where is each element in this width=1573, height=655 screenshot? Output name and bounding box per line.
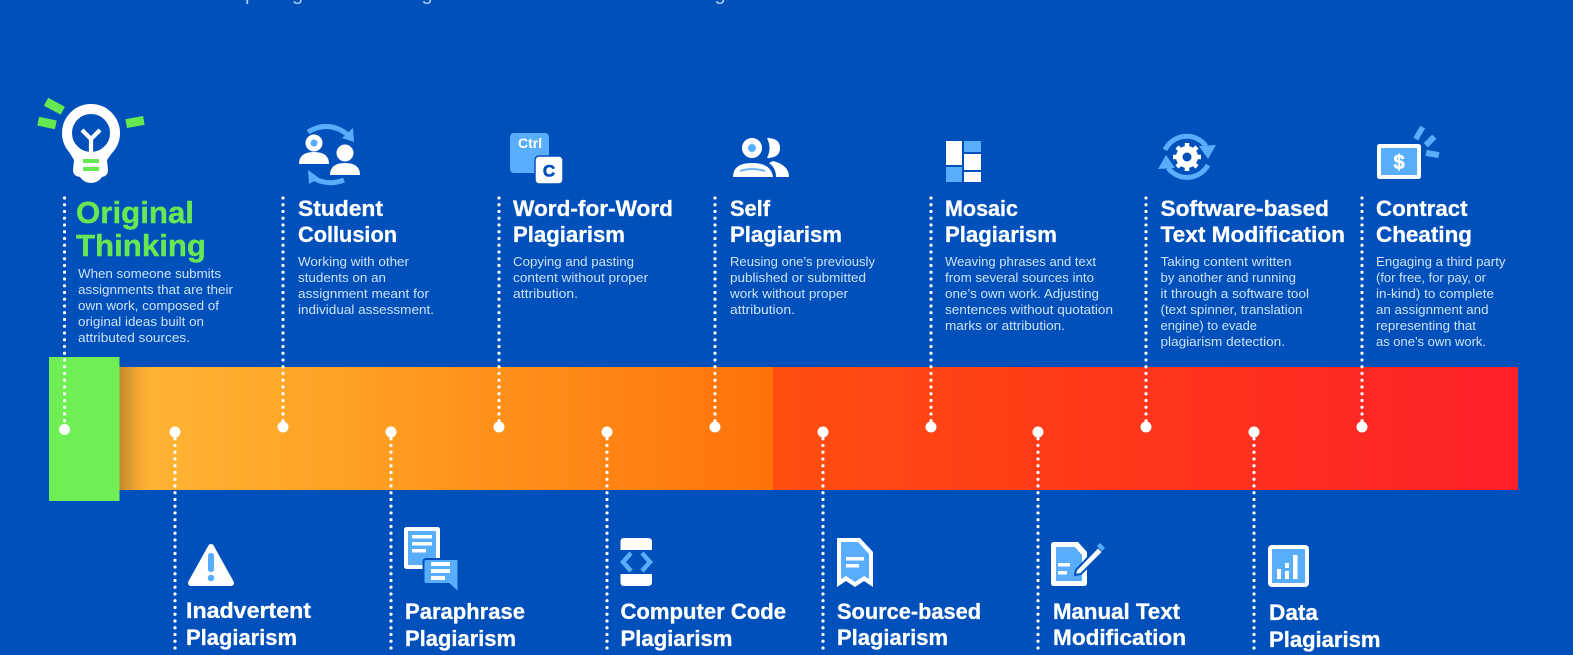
leader line	[929, 198, 933, 427]
description: When someone submits	[78, 266, 222, 281]
description: attribution.	[513, 286, 578, 301]
icon: Ctrl C keys	[510, 133, 563, 184]
heading: Data	[1269, 600, 1319, 625]
heading	[837, 599, 981, 650]
panel: Manual Text Modification	[1032, 426, 1186, 650]
description: Engaging a third party	[1376, 254, 1506, 269]
description: Taking content written	[1160, 254, 1292, 269]
leader line	[1360, 198, 1364, 427]
description	[78, 266, 234, 345]
heading: Plagiarism	[1269, 627, 1380, 652]
description: attributed sources.	[78, 330, 190, 345]
panel: Word-for-Word Plagiarism	[494, 133, 673, 432]
leader line	[713, 198, 717, 427]
heading: Plagiarism	[730, 222, 842, 247]
heading: Plagiarism	[945, 222, 1057, 247]
heading: Plagiarism	[513, 222, 625, 247]
description: an assignment and	[1376, 302, 1488, 317]
leader line	[821, 432, 825, 650]
heading: Computer Code	[620, 599, 786, 624]
icon: torn document	[837, 538, 873, 587]
description: assignment meant for	[298, 286, 430, 301]
description: in-kind) to complete	[1376, 286, 1494, 301]
heading: Plagiarism	[186, 625, 297, 650]
marker dot	[59, 424, 70, 435]
leader line	[1252, 432, 1256, 650]
description: from several sources into	[945, 270, 1094, 285]
marker dot	[926, 422, 936, 432]
description	[1160, 254, 1309, 349]
description	[1376, 254, 1506, 349]
marker dot	[818, 426, 828, 438]
heading: Plagiarism	[620, 626, 732, 651]
heading: Modification	[1053, 625, 1186, 650]
panel: Source-based Plagiarism	[818, 426, 981, 650]
leader line	[281, 198, 285, 427]
description: Copying and pasting	[513, 254, 634, 269]
marker dot	[170, 426, 180, 438]
description: engine) to evade	[1160, 318, 1257, 333]
panel: Paraphrase Plagiarism	[386, 426, 525, 651]
icon: person with shadow	[733, 138, 789, 177]
marker dot	[278, 422, 288, 432]
description: Working with other	[298, 254, 410, 269]
icon: money screen	[1377, 126, 1439, 179]
heading: Original	[76, 196, 194, 230]
cropped header text	[245, 0, 726, 5]
icon: Ctrl C keys: Ctrl	[518, 135, 542, 151]
heading	[76, 196, 206, 263]
description	[513, 254, 649, 301]
description: (text spinner, translation	[1160, 302, 1302, 317]
panel: Self Plagiarism	[710, 138, 875, 432]
description: one’s own work. Adjusting	[945, 286, 1099, 301]
leader line	[497, 198, 501, 427]
heading	[1269, 600, 1380, 652]
icon: money screen: $	[1393, 152, 1405, 174]
marker dot	[602, 426, 612, 438]
panel: Software-based Text Modification	[1140, 136, 1345, 432]
icon: light bulb	[37, 98, 145, 183]
leader line	[1144, 198, 1148, 427]
marker dot	[1356, 422, 1368, 432]
heading	[513, 196, 673, 247]
heading: Contract	[1376, 196, 1468, 221]
leader line	[1036, 432, 1040, 650]
description: students on an	[298, 270, 386, 285]
heading: Software-based	[1160, 196, 1329, 221]
description: assignments that are their	[78, 282, 234, 297]
description: it through a software tool	[1160, 286, 1309, 301]
heading	[405, 599, 525, 651]
description: individual assessment.	[298, 302, 434, 317]
description: content without proper	[513, 270, 649, 285]
leader line	[63, 198, 66, 429]
heading	[1160, 196, 1345, 247]
icon: document and speech bubble	[404, 527, 458, 593]
description: marks or attribution.	[945, 318, 1065, 333]
heading: Cheating	[1376, 222, 1472, 247]
marker dot	[386, 426, 396, 438]
leader line	[173, 432, 177, 650]
description: Reusing one’s previously	[730, 254, 875, 269]
heading	[1376, 196, 1472, 247]
description: attribution.	[730, 302, 795, 317]
panel: Data Plagiarism	[1248, 426, 1380, 652]
icon: warning triangle	[191, 547, 231, 583]
description: published or submitted	[730, 270, 866, 285]
description: work without proper	[729, 286, 849, 301]
heading: Source-based	[837, 599, 981, 624]
heading	[186, 598, 312, 650]
heading	[298, 196, 397, 247]
heading: Student	[298, 196, 384, 221]
marker dot	[494, 422, 504, 432]
panel: Inadvertent Plagiarism	[170, 426, 312, 650]
heading	[730, 196, 842, 247]
icon: document and pencil	[1051, 542, 1105, 586]
heading: Plagiarism	[405, 626, 516, 651]
heading: Mosaic	[945, 196, 1018, 221]
marker dot	[710, 422, 720, 432]
marker dot	[1032, 426, 1044, 438]
leader line	[389, 432, 393, 650]
icon: mosaic tiles	[946, 141, 981, 182]
heading: Manual Text	[1053, 599, 1181, 624]
description	[729, 254, 875, 317]
heading	[945, 196, 1057, 247]
panel: Original Thinking	[37, 98, 234, 435]
icon: bar chart screen	[1268, 545, 1309, 587]
description: as one’s own work.	[1376, 334, 1486, 349]
heading: Inadvertent	[186, 598, 312, 623]
description: (for free, for pay, or	[1376, 270, 1487, 285]
heading: Text Modification	[1160, 222, 1345, 247]
heading	[1053, 599, 1186, 650]
description: Weaving phrases and text	[945, 254, 1096, 269]
panel: Contract Cheating	[1356, 126, 1506, 433]
heading: Paraphrase	[405, 599, 525, 624]
description: sentences without quotation	[945, 302, 1113, 317]
marker dot	[1140, 422, 1152, 432]
icon: two students with arrows	[299, 126, 360, 184]
icon: gear with cycle arrows	[1158, 136, 1216, 177]
heading: Collusion	[298, 222, 397, 247]
heading: Self	[730, 196, 771, 221]
leader line	[605, 432, 609, 650]
heading	[620, 599, 786, 651]
panel: Mosaic Plagiarism	[926, 141, 1113, 432]
spectrum bar	[49, 357, 1518, 501]
description: original ideas built on	[78, 314, 204, 329]
description: by another and running	[1160, 270, 1296, 285]
icon: Ctrl C keys: C	[543, 162, 555, 180]
panel: Computer Code Plagiarism	[602, 426, 786, 651]
description	[945, 254, 1113, 333]
description: own work, composed of	[78, 298, 219, 313]
heading: Thinking	[76, 229, 206, 263]
icon: code brackets on device	[620, 538, 652, 586]
panel: Student Collusion	[278, 126, 434, 432]
heading: Word-for-Word	[513, 196, 673, 221]
description: plagiarism detection.	[1160, 334, 1285, 349]
heading: Plagiarism	[837, 625, 948, 650]
description: representing that	[1376, 318, 1476, 333]
description	[298, 254, 434, 317]
marker dot	[1248, 426, 1260, 438]
